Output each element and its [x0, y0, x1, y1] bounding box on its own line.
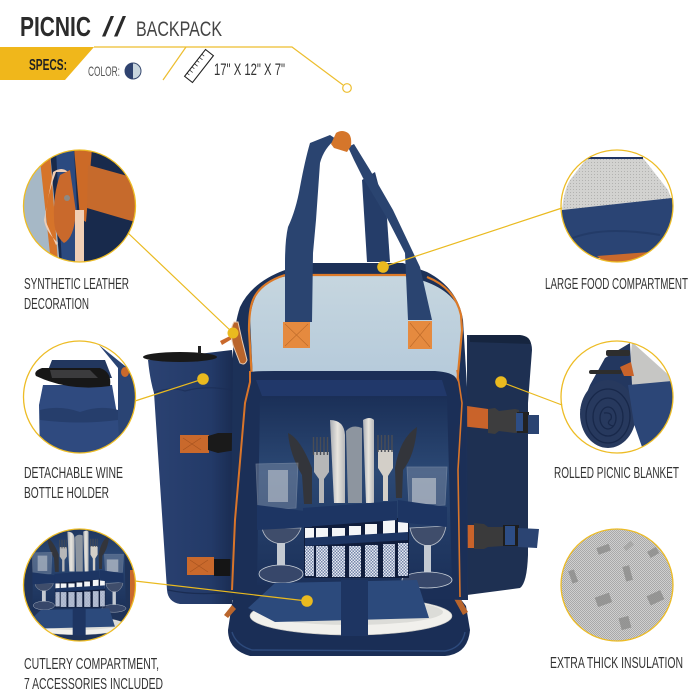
- elastic bands: [257, 500, 447, 546]
- colour spec: COLOR:: [88, 63, 120, 79]
- specs banner: SPECS:: [29, 57, 67, 74]
- orange zip tag left: [224, 605, 236, 618]
- back handle: [362, 172, 390, 262]
- specs banner: [0, 47, 94, 80]
- circle: cutlery compartment: [24, 530, 135, 640]
- wine glass right: [402, 467, 452, 588]
- circle outline 3: [24, 529, 136, 641]
- circle: synthetic leather decoration: [24, 150, 135, 262]
- orange handle loop: [331, 131, 351, 152]
- specs leader line: [94, 47, 351, 92]
- circle outline 5: [561, 341, 673, 453]
- leader lines with dots: [128, 208, 562, 607]
- napkin strap: [341, 580, 368, 636]
- title: [20, 11, 222, 42]
- plate: [250, 597, 452, 635]
- interior: [248, 398, 452, 636]
- wine bottle holder: [143, 346, 238, 604]
- title: BACKPACK: [136, 18, 222, 41]
- utensils: [288, 418, 417, 504]
- cutlery pouches: [304, 518, 409, 578]
- front strap and handle left: [285, 135, 336, 322]
- bottom flap: [224, 588, 470, 656]
- label: synthetic leather: SYNTHETIC LEATHER: [24, 276, 129, 293]
- orange patch left: [283, 322, 310, 348]
- icon: ruler: [185, 50, 213, 82]
- label: decoration: DECORATION: [24, 296, 89, 313]
- wine glass left: [256, 463, 303, 583]
- label: detachable wine: DETACHABLE WINE: [24, 465, 123, 482]
- circle: rolled picnic blanket: [580, 343, 672, 448]
- circle: large food compartment: [562, 157, 672, 262]
- side zipper tag: [220, 322, 247, 364]
- orange zip tag right: [453, 597, 468, 615]
- light panel: [250, 276, 462, 386]
- dimensions: 17" X 12" X 7": [214, 60, 285, 79]
- rolled blanket: [460, 335, 539, 595]
- circle outline 6: [561, 529, 673, 641]
- circle: extra thick insulation: [562, 530, 672, 640]
- circle: detachable wine bottle holder: [35, 345, 135, 452]
- circle outline 1: [24, 150, 136, 262]
- title: PICNIC: [20, 11, 91, 42]
- label: accessories included: 7 ACCESSORIES INCLUDED: [24, 676, 163, 693]
- main backpack body: [220, 131, 468, 600]
- title: //: [102, 11, 126, 42]
- circle outline 4: [561, 150, 673, 262]
- orange patch right: [408, 321, 432, 349]
- label: bottle holder: BOTTLE HOLDER: [24, 485, 109, 502]
- holder strap: top: [180, 433, 236, 453]
- napkin: [248, 580, 429, 622]
- front strap and handle right: [348, 144, 432, 320]
- label: cutlery compartment: CUTLERY COMPARTMENT,: [24, 656, 159, 673]
- holder strap: bottom: [187, 557, 231, 576]
- front compartment: [232, 370, 467, 636]
- circle outline 2: [24, 341, 136, 453]
- blanket buckle: top: [460, 405, 539, 434]
- blanket buckle: bottom: [467, 523, 539, 549]
